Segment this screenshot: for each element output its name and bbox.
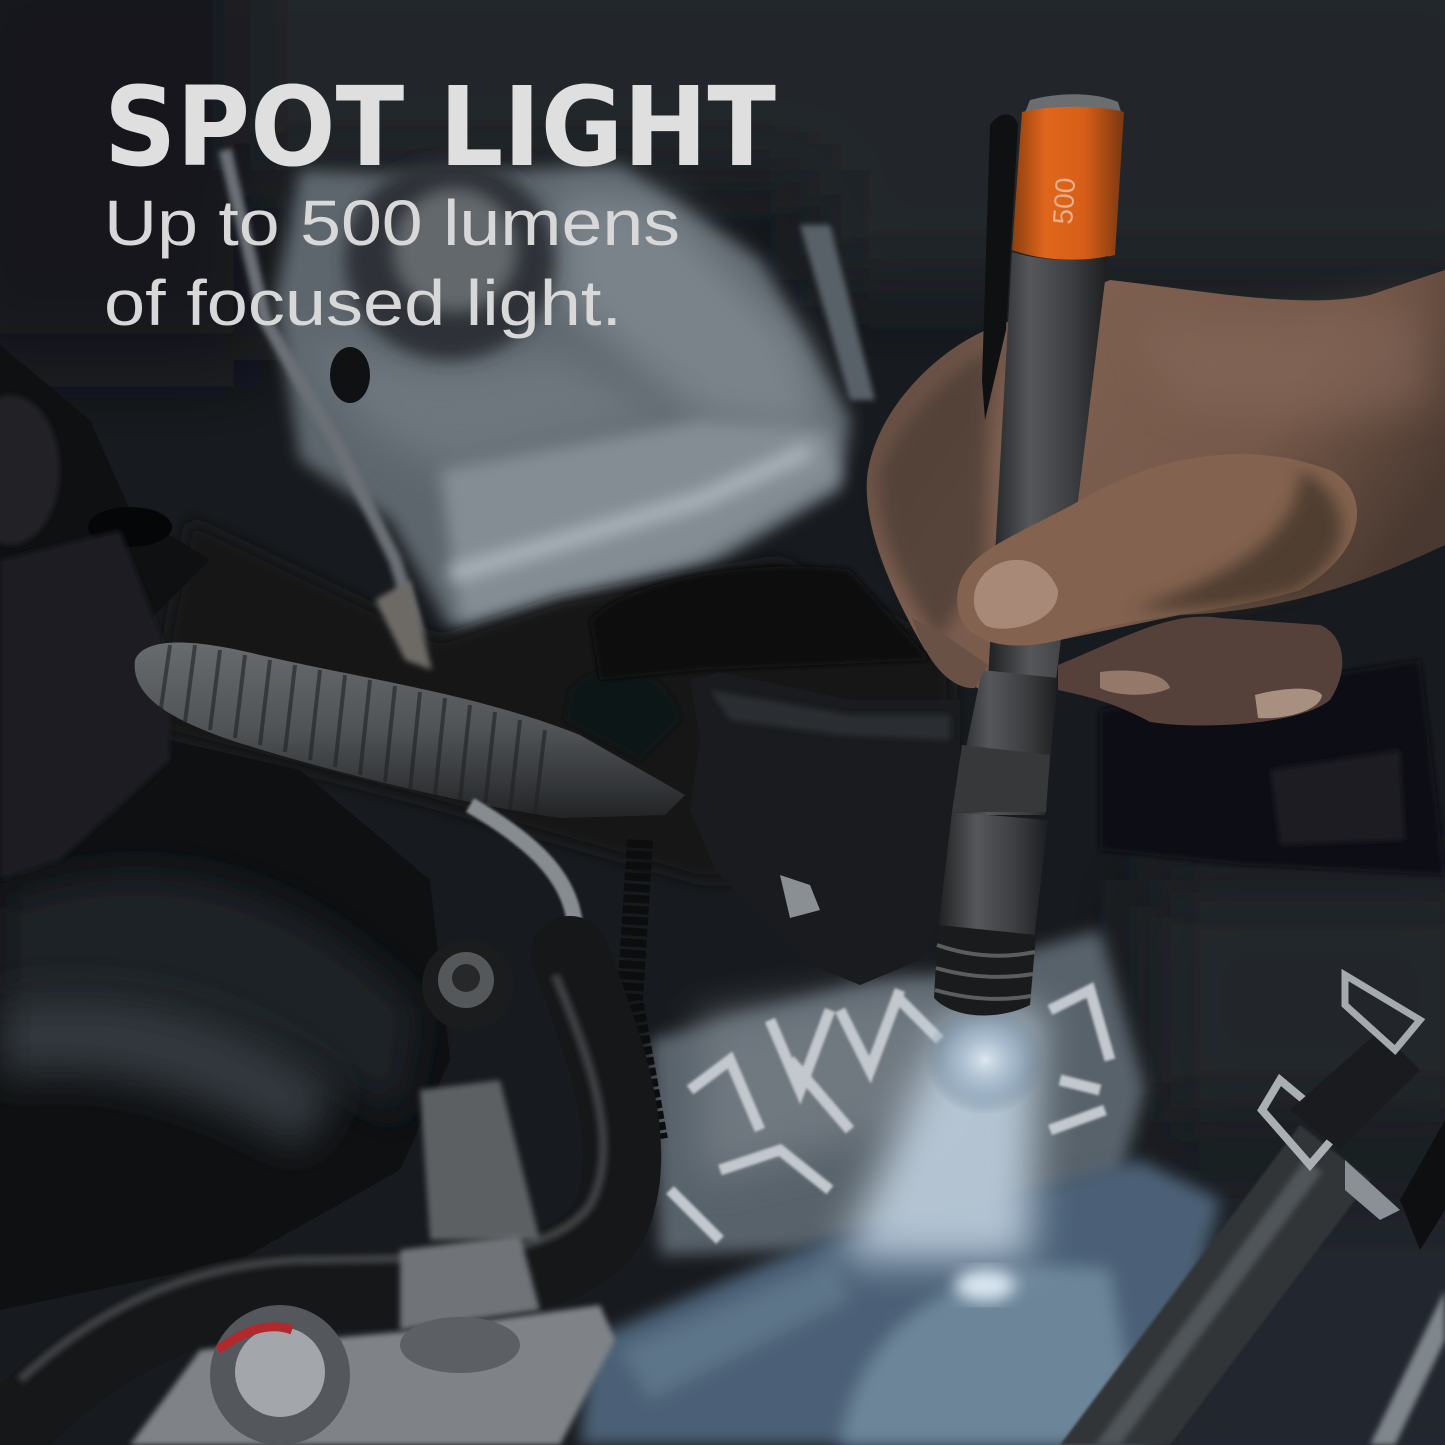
flashlight lower barrel	[952, 670, 1058, 815]
small orange connector	[375, 580, 432, 670]
ribbed black cable	[630, 840, 655, 1140]
alternator silver body	[650, 930, 1145, 1255]
light beam	[840, 1005, 1045, 1260]
thin metal pipe	[470, 805, 575, 925]
dark mid band behind hose	[150, 520, 960, 880]
right side hoses and clips	[1060, 660, 1445, 1445]
silver bolt housing bottom left	[130, 1080, 615, 1445]
index finger tip	[912, 618, 988, 688]
subtitle text: of focused light.	[104, 267, 622, 339]
subtitle text	[104, 187, 680, 339]
black rubber hose	[20, 955, 622, 1420]
black plastic bracket	[565, 567, 960, 985]
product marking on orange band: 500	[1047, 177, 1081, 225]
flashlight head	[938, 812, 1048, 940]
flashlight tail cap	[1022, 94, 1122, 120]
lower fingers	[1058, 617, 1342, 726]
hex bolt	[422, 939, 514, 1031]
flashlight	[934, 94, 1124, 1015]
silver engine cover	[225, 150, 875, 670]
corrugated grey hose	[135, 642, 685, 818]
thumb	[957, 454, 1357, 646]
black cover at left	[0, 345, 450, 1310]
blue-grey lower housing	[580, 1160, 1220, 1445]
subtitle text: Up to 500 lumens	[104, 187, 680, 259]
flashlight upper barrel	[988, 252, 1108, 680]
title: SPOT LIGHT	[104, 63, 776, 191]
flashlight clip	[982, 114, 1018, 420]
hand back, behind flashlight	[867, 270, 1445, 690]
thumb and fingers in front	[912, 454, 1357, 726]
flashlight orange band	[1012, 107, 1124, 260]
